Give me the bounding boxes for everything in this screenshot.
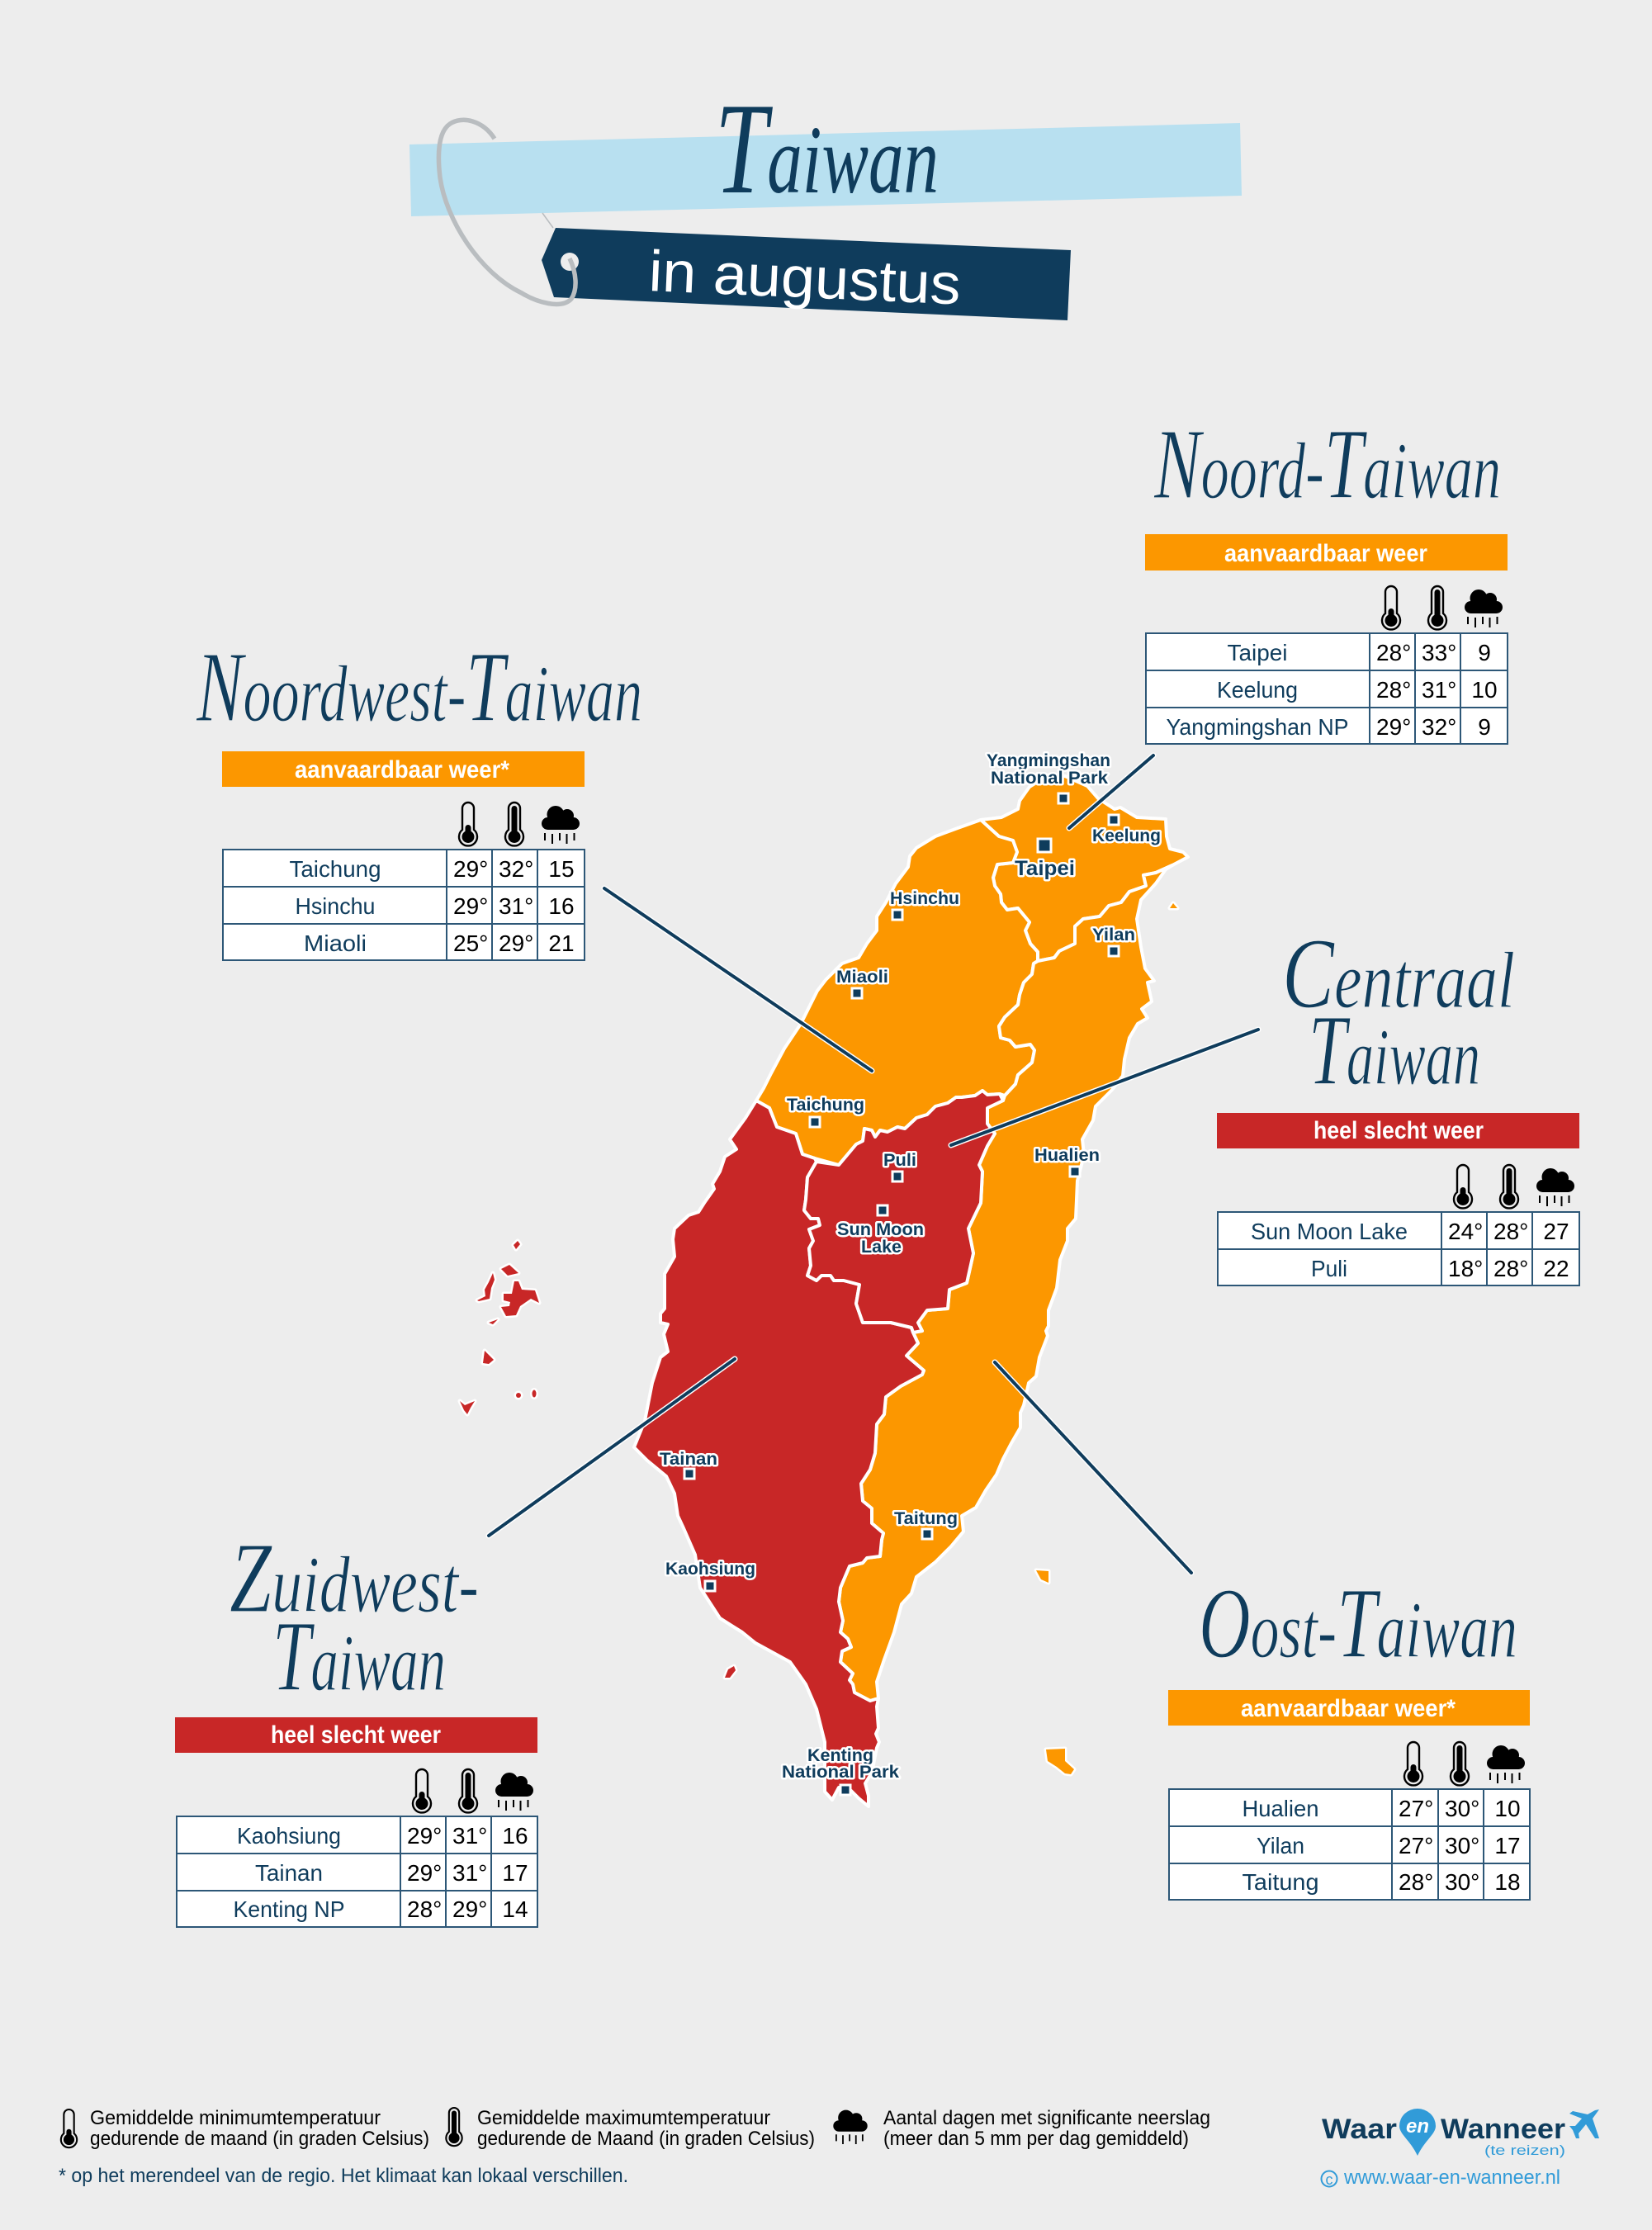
table: 10 bbox=[1494, 1796, 1521, 1821]
logo: en bbox=[1406, 2115, 1429, 2138]
logo: (te reizen) bbox=[1484, 2142, 1565, 2158]
table: 18 bbox=[1494, 1869, 1521, 1895]
city labels: Lake bbox=[861, 1238, 902, 1257]
city markers bbox=[684, 793, 1119, 1795]
legend: maximum temperature: gedurende de Maand (in graden Celsius) bbox=[477, 2128, 815, 2150]
table bbox=[1146, 633, 1508, 744]
verdict banner bbox=[1217, 1113, 1579, 1148]
heading bbox=[1282, 918, 1515, 1106]
table bbox=[177, 1816, 537, 1927]
table: Hsinchu bbox=[296, 893, 375, 919]
leader lines bbox=[489, 755, 1258, 1573]
table: 31° bbox=[1422, 677, 1456, 703]
table: 30° bbox=[1445, 1869, 1479, 1895]
panel: Centraal Taiwan bbox=[1217, 918, 1579, 1285]
city labels: Hualien bbox=[1034, 1146, 1100, 1165]
panel: Oost-Taiwan bbox=[1168, 1568, 1530, 1900]
tag string bbox=[542, 213, 553, 228]
region: Noord-Taiwan bbox=[981, 776, 1188, 961]
icons bbox=[1382, 586, 1503, 629]
islands: east bbox=[1036, 903, 1177, 1774]
table: Miaoli bbox=[304, 930, 367, 956]
website: www.waar-en-wanneer.nl bbox=[1343, 2166, 1560, 2189]
icons bbox=[459, 803, 580, 845]
table: 29° bbox=[499, 930, 533, 956]
tag ring bbox=[438, 120, 575, 304]
table: Yangmingshan NP bbox=[1166, 714, 1349, 740]
city labels: Kaohsiung bbox=[665, 1560, 755, 1579]
legend: minimum temperature: gedurende de maand (in graden Celsius) bbox=[90, 2128, 429, 2150]
panel: Noord-Taiwan bbox=[1145, 409, 1508, 744]
table bbox=[1218, 1212, 1579, 1285]
heading: Taiwan bbox=[272, 1601, 446, 1712]
table: Taichung bbox=[289, 856, 381, 882]
table: Taitung bbox=[1242, 1869, 1319, 1895]
table: 28° bbox=[1376, 640, 1411, 665]
table: 29° bbox=[407, 1823, 442, 1849]
region: Zuidwest-Taiwan bbox=[634, 1101, 924, 1806]
table: 29° bbox=[1376, 714, 1411, 740]
icons bbox=[1404, 1742, 1525, 1785]
heading bbox=[230, 1522, 479, 1712]
subtitle: in augustus bbox=[647, 239, 962, 316]
legend: rain days bbox=[833, 2107, 1210, 2150]
table: 16 bbox=[548, 893, 575, 919]
footnote: * op het merendeel van de regio. Het klimaat kan lokaal verschillen. bbox=[59, 2165, 628, 2187]
verdict banner: aanvaardbaar weer bbox=[1224, 540, 1427, 567]
table: 10 bbox=[1471, 677, 1498, 703]
table: 30° bbox=[1445, 1796, 1479, 1821]
legend: minimum temperature bbox=[61, 2107, 429, 2150]
city labels: Kenting bbox=[807, 1746, 873, 1765]
heading: Centraal bbox=[1282, 918, 1515, 1030]
table: 27 bbox=[1543, 1219, 1569, 1244]
verdict banner bbox=[1168, 1690, 1530, 1726]
table: 24° bbox=[1448, 1219, 1483, 1244]
city labels: Miaoli bbox=[836, 968, 888, 987]
tag hole bbox=[561, 253, 579, 271]
verdict banner: aanvaardbaar weer* bbox=[1241, 1695, 1456, 1722]
verdict banner bbox=[175, 1717, 537, 1753]
table: 29° bbox=[453, 856, 488, 882]
city labels: Puli bbox=[883, 1151, 916, 1170]
table: 29° bbox=[453, 893, 488, 919]
table: Hualien bbox=[1242, 1796, 1319, 1821]
city labels: National Park bbox=[991, 769, 1108, 788]
title bbox=[409, 77, 1242, 320]
table: 28° bbox=[1493, 1256, 1528, 1281]
title text: Taiwan bbox=[715, 77, 939, 221]
table: 18° bbox=[1448, 1256, 1483, 1281]
icon: plane bbox=[1569, 2109, 1599, 2138]
legend: rain days: Aantal dagen met significante neerslag bbox=[883, 2107, 1210, 2129]
city labels: Yangmingshan bbox=[987, 751, 1110, 770]
table: 31° bbox=[452, 1823, 487, 1849]
heading: Taiwan bbox=[1309, 995, 1480, 1106]
table: 9 bbox=[1478, 640, 1491, 665]
table: 21 bbox=[548, 930, 575, 956]
table: Yilan bbox=[1257, 1833, 1304, 1858]
heading: Zuidwest- bbox=[230, 1522, 479, 1634]
legend: minimum temperature: Gemiddelde minimumtemperatuur bbox=[90, 2107, 381, 2129]
table: 9 bbox=[1478, 714, 1491, 740]
verdict banner bbox=[1145, 534, 1508, 571]
table: Taipei bbox=[1227, 640, 1288, 665]
logo pin bbox=[1399, 2109, 1436, 2156]
table: 30° bbox=[1445, 1833, 1479, 1858]
table: 17 bbox=[1494, 1833, 1521, 1858]
table: 22 bbox=[1543, 1256, 1569, 1281]
logo: Wanneer bbox=[1441, 2114, 1565, 2145]
city labels: Keelung bbox=[1092, 826, 1161, 845]
table: 29° bbox=[407, 1860, 442, 1886]
table: Kaohsiung bbox=[237, 1823, 341, 1849]
city labels: National Park bbox=[782, 1763, 899, 1782]
table: Puli bbox=[1311, 1256, 1347, 1281]
table: 25° bbox=[453, 930, 488, 956]
table: 32° bbox=[499, 856, 533, 882]
legend: rain days: (meer dan 5 mm per dag gemiddeld) bbox=[883, 2128, 1189, 2150]
city labels: Taipei bbox=[1015, 857, 1075, 880]
heading: Noord-Taiwan bbox=[1153, 409, 1501, 520]
map of Taiwan bbox=[460, 751, 1188, 1806]
table: Sun Moon Lake bbox=[1251, 1219, 1408, 1244]
table: Keelung bbox=[1217, 677, 1298, 703]
region: Centraal Taiwan bbox=[804, 1091, 1003, 1333]
verdict banner: aanvaardbaar weer* bbox=[295, 756, 509, 784]
table: 14 bbox=[502, 1896, 528, 1922]
table: Tainan bbox=[255, 1860, 323, 1886]
table: 28° bbox=[1399, 1869, 1433, 1895]
table: 16 bbox=[502, 1823, 528, 1849]
city labels bbox=[660, 751, 1161, 1782]
icons bbox=[1454, 1165, 1574, 1208]
title tag bbox=[542, 228, 1071, 320]
verdict banner: heel slecht weer bbox=[1314, 1117, 1484, 1144]
table: 27° bbox=[1399, 1796, 1433, 1821]
table: 29° bbox=[452, 1896, 487, 1922]
city labels: Taichung bbox=[787, 1096, 864, 1115]
logo words: Waar bbox=[1322, 2114, 1397, 2145]
table bbox=[223, 850, 585, 960]
city labels: Sun Moon bbox=[837, 1220, 924, 1239]
verdict banner bbox=[222, 751, 585, 787]
table: 33° bbox=[1422, 640, 1456, 665]
table: 28° bbox=[1376, 677, 1411, 703]
heading: Noordwest-Taiwan bbox=[196, 632, 642, 743]
heading: Oost-Taiwan bbox=[1199, 1568, 1517, 1679]
panel: Zuidwest-Taiwan bbox=[175, 1522, 537, 1927]
table: 15 bbox=[548, 856, 575, 882]
table: 17 bbox=[502, 1860, 528, 1886]
city labels: Yilan bbox=[1092, 926, 1135, 945]
legend: maximum temperature bbox=[446, 2107, 815, 2150]
city labels: Hsinchu bbox=[890, 889, 959, 908]
legend: maximum temperature: Gemiddelde maximumtemperatuur bbox=[477, 2107, 770, 2129]
table: 32° bbox=[1422, 714, 1456, 740]
table: 27° bbox=[1399, 1833, 1433, 1858]
region: Oost-Taiwan bbox=[839, 865, 1172, 1701]
title band bbox=[409, 123, 1242, 216]
website: c bbox=[1326, 2171, 1332, 2188]
panel: Noordwest-Taiwan bbox=[196, 632, 642, 960]
logo bbox=[1321, 2109, 1599, 2189]
table: 28° bbox=[407, 1896, 442, 1922]
region: Noordwest-Taiwan bbox=[756, 820, 1038, 1165]
table bbox=[1169, 1789, 1530, 1900]
table: Kenting NP bbox=[233, 1896, 345, 1922]
verdict banner: heel slecht weer bbox=[271, 1721, 441, 1749]
legend bbox=[59, 2107, 1210, 2187]
city labels: Tainan bbox=[660, 1450, 717, 1469]
table: 31° bbox=[452, 1860, 487, 1886]
table: 28° bbox=[1493, 1219, 1528, 1244]
table: 31° bbox=[499, 893, 533, 919]
city labels: Taitung bbox=[894, 1509, 958, 1528]
islands: Penghu bbox=[460, 1241, 736, 1678]
icons bbox=[413, 1769, 533, 1812]
